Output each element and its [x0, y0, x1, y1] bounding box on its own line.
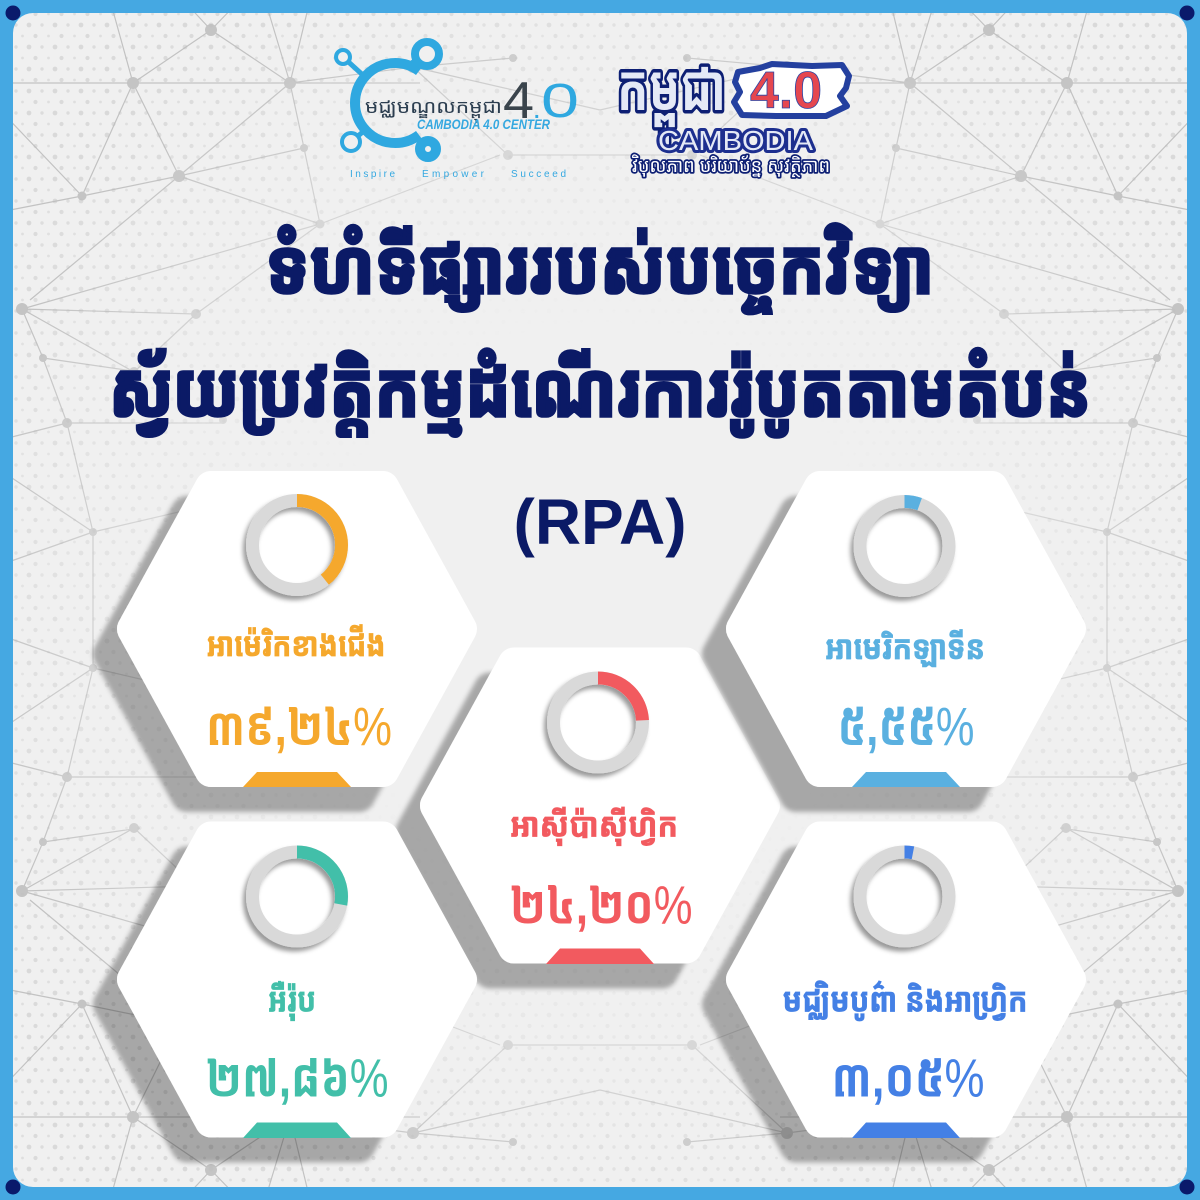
logo: Cambodia 4.0 Center: 4 — [503, 72, 534, 130]
value: ៥,៥៥% — [838, 697, 974, 757]
tab — [243, 772, 351, 787]
logo: Cambodia 4.0 Center: Empower — [422, 169, 485, 180]
icon: network C — [336, 42, 439, 157]
donut chart 5.55% — [860, 502, 949, 590]
value: ៣,០៥% — [832, 1048, 984, 1108]
panel: North America — [133, 487, 461, 787]
logo: Cambodia 4.0: វិបុលភាព បរិយាប័ន្ន សុវត្ថិភាព — [631, 154, 830, 178]
label: អាស៊ីប៉ាស៊ីហ្វិក — [510, 806, 678, 846]
badge 4.0 — [734, 64, 849, 116]
tab — [852, 1122, 960, 1138]
logo: Cambodia 4.0 Center — [336, 42, 579, 180]
logo: Cambodia 4.0 Center: CAMBODIA 4.0 CENTER — [417, 116, 551, 132]
donut chart 3.05% — [860, 852, 949, 941]
logo: Cambodia 4.0 Center: Succeed — [511, 169, 566, 180]
tab — [546, 948, 654, 964]
logo: Cambodia 4.0 Center: មជ្ឈមណ្ឌលកម្ពុជា — [365, 97, 502, 125]
title line 3: (RPA) — [514, 486, 686, 558]
title line 2: ស្វ័យប្រវត្តិកម្មដំណើរការរ៉ូបូតតាមតំបន់ — [109, 348, 1091, 437]
donut chart 27.86% — [252, 852, 342, 941]
value: ២៧,៨៦% — [206, 1048, 388, 1108]
title line 1: ទំហំទីផ្សាររបស់បច្ចេកវិទ្យា — [266, 223, 934, 314]
value: ២៤,២០% — [510, 876, 692, 936]
logo: Cambodia 4.0: 4.0 — [750, 62, 822, 120]
value: ៣៩,២៤% — [206, 697, 392, 757]
tab — [852, 772, 960, 787]
logo: Cambodia 4.0 Center: 0 — [541, 75, 579, 128]
logo: Cambodia 4.0 — [617, 52, 849, 178]
label: អាមេរិកឡាទីន — [825, 629, 985, 667]
donut chart 39.24% — [252, 500, 342, 590]
logo: Cambodia 4.0 Center: Inspire — [350, 169, 395, 180]
panel: Middle East and Africa — [742, 838, 1070, 1138]
donut chart 24.20% — [554, 678, 642, 767]
label: មជ្ឈិមបូព៌ា និងអាហ្វ្រិក — [782, 981, 1028, 1021]
panel: Europe — [133, 838, 461, 1138]
label: អឺរ៉ុប — [268, 982, 316, 1020]
logo: Cambodia 4.0 Center: . — [534, 101, 540, 123]
label: អាម៉េរិកខាងជើង — [206, 625, 386, 663]
logo: Cambodia 4.0: កម្ពុជា — [617, 52, 726, 145]
logo: Cambodia 4.0: CAMBODIA — [658, 125, 813, 156]
tab — [243, 1122, 351, 1138]
panel: Asia-Pacific — [436, 664, 764, 964]
title — [109, 223, 1091, 558]
panel: Latin America — [742, 487, 1070, 787]
